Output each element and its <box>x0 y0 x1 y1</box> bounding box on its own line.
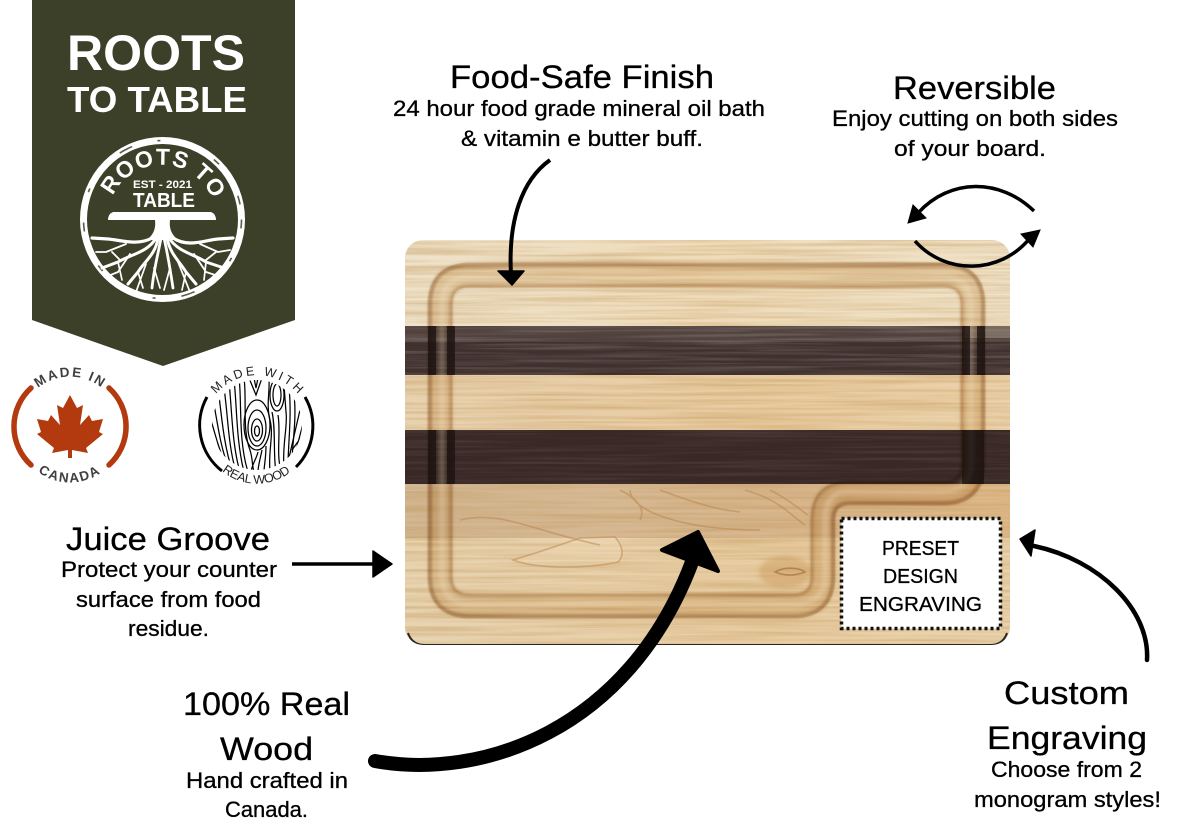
arrow: custom engraving <box>1020 530 1147 660</box>
badge: made in Canada: MADE IN <box>34 367 106 388</box>
arrow: real wood <box>375 532 718 765</box>
callout: real wood: Hand crafted in <box>186 768 348 793</box>
callout: reversible: Enjoy cutting on both sides <box>832 106 1118 131</box>
callout: reversible: of your board. <box>894 136 1046 161</box>
logo: round roots emblem: TABLE <box>133 190 195 212</box>
logo: round roots emblem: EST - 2021 <box>133 179 192 191</box>
icon: wood grain <box>211 378 304 472</box>
arrow: food-safe finish <box>498 160 550 285</box>
callout: juice groove: Protect your counter <box>61 557 277 582</box>
walnut bands <box>405 326 1010 484</box>
callout: juice groove <box>61 521 277 641</box>
callout: real wood: 100% Real <box>183 686 350 722</box>
board bottom edge <box>408 633 1007 645</box>
callout: food-safe finish <box>393 59 765 151</box>
callout: reversible <box>832 70 1118 161</box>
callout: food-safe finish: & vitamin e butter buff. <box>461 126 703 151</box>
arrows: reversible <box>908 186 1040 266</box>
arrow: juice groove <box>292 551 392 577</box>
callout: juice groove: surface from food <box>76 587 261 612</box>
callout: real wood: Wood <box>220 731 313 767</box>
callout: custom engraving: monogram styles! <box>974 787 1161 812</box>
brand heading <box>67 25 247 120</box>
engraving placeholder: PRESET <box>882 538 959 560</box>
callout: food-safe finish: Food-Safe Finish <box>450 59 714 95</box>
logo: round roots emblem <box>80 137 245 302</box>
brand heading: TO TABLE <box>67 79 247 120</box>
banner: brand ribbon <box>32 0 295 366</box>
badge: made with real wood: REAL WOOD <box>222 464 289 484</box>
knots and figure in bottom plank <box>460 490 811 588</box>
callout: custom engraving: Choose from 2 <box>991 757 1142 782</box>
engraving placeholder: ENGRAVING <box>859 594 982 616</box>
badge: made in Canada <box>11 367 129 483</box>
callout: juice groove: residue. <box>128 616 209 641</box>
brand heading: ROOTS <box>67 25 245 81</box>
cutting board <box>405 240 1010 645</box>
logo: round roots emblem: ROOTS TO <box>100 148 224 196</box>
engraving placeholder: DESIGN <box>883 566 958 588</box>
engraving placeholder <box>842 518 1000 628</box>
badge: made in Canada: CANADA <box>40 466 100 483</box>
callout: custom engraving: Custom <box>1004 675 1129 711</box>
callout: food-safe finish: 24 hour food grade mineral oil bath <box>393 96 765 121</box>
callout: real wood <box>183 686 350 822</box>
callout: custom engraving: Engraving <box>987 720 1147 756</box>
juice groove <box>430 265 983 616</box>
icon: maple leaf <box>37 395 103 458</box>
callout: custom engraving <box>974 675 1161 812</box>
badge: made with real wood: MADE WITH <box>210 366 304 394</box>
groove across walnut <box>428 326 985 484</box>
callout: real wood: Canada. <box>225 797 308 822</box>
callout: reversible: Reversible <box>893 70 1056 106</box>
badge: made with real wood <box>198 366 314 484</box>
callout: juice groove: Juice Groove <box>66 521 270 557</box>
